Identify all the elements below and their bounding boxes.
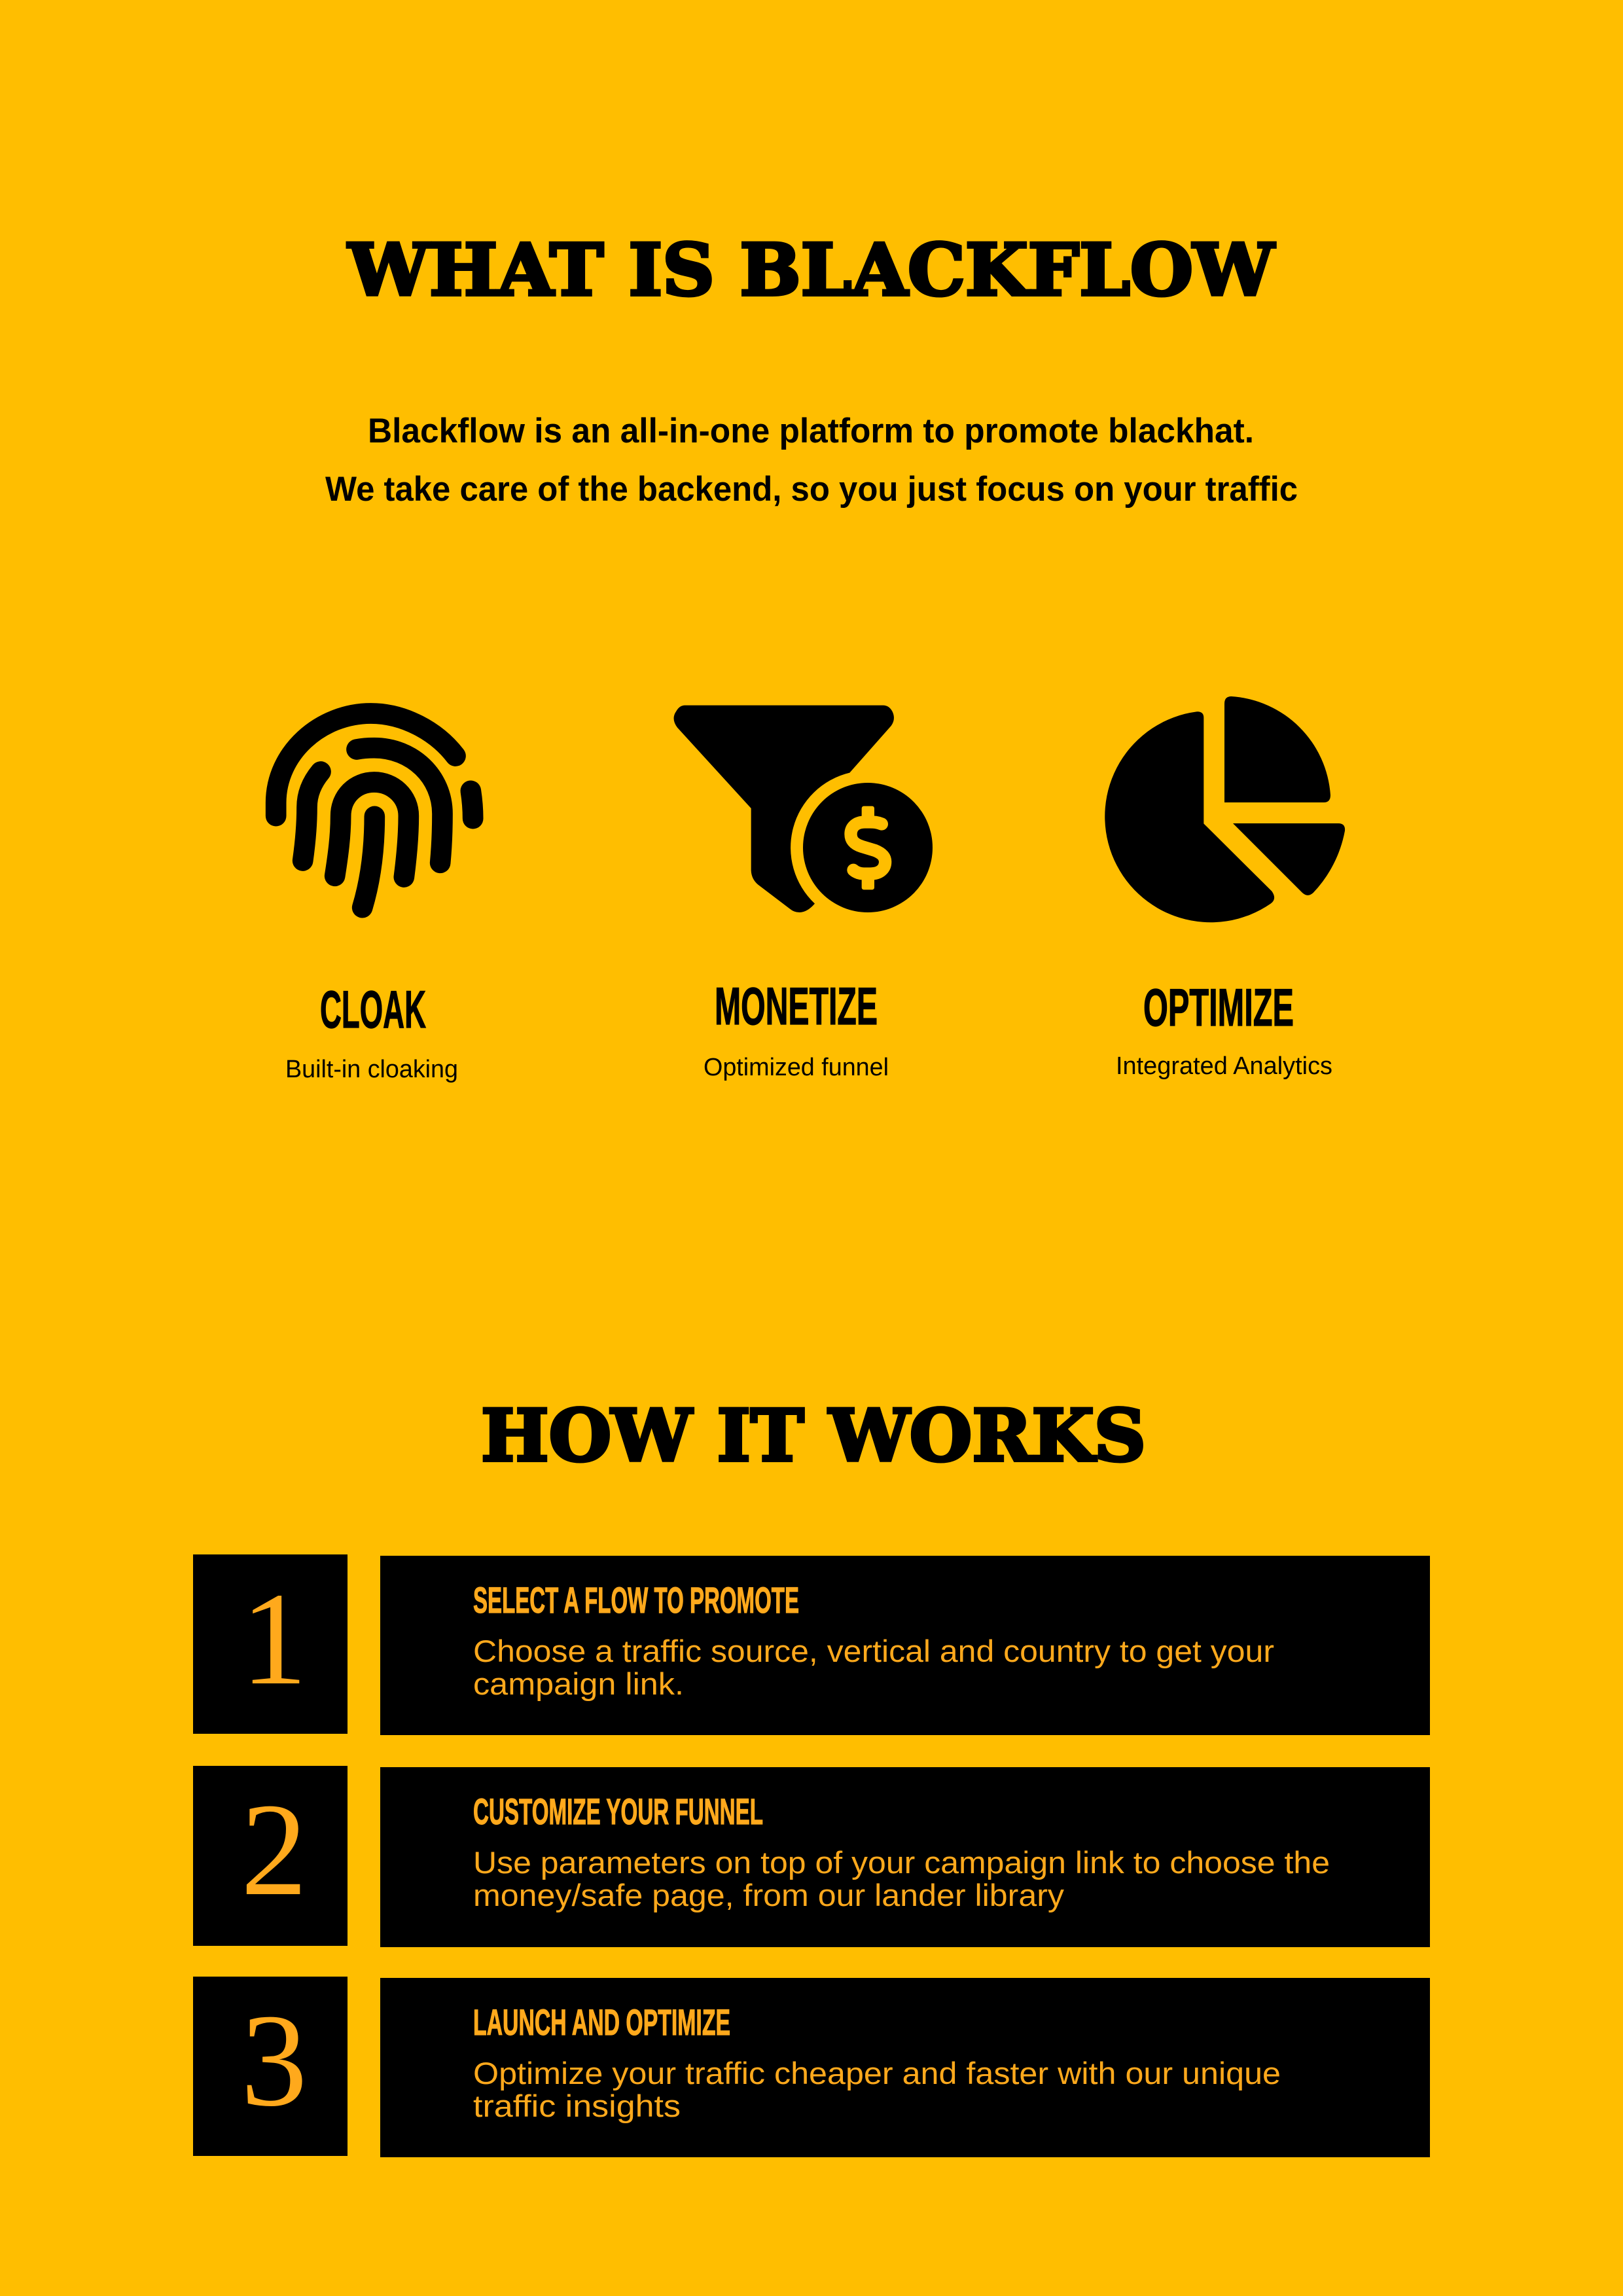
number box 1 xyxy=(193,1554,348,1734)
panel: step 2 text xyxy=(380,1767,1430,1947)
step 2 xyxy=(193,1766,1430,1947)
heading: cloak: CLOAK xyxy=(320,980,426,1039)
panel: step 2 text: Use parameters on top of your campaign link to choose the xyxy=(473,1845,1330,1880)
icon: fingerprint xyxy=(276,713,473,908)
step 3 xyxy=(193,1977,1430,2157)
panel: step 2 text: money/safe page, from our lander library xyxy=(473,1878,1065,1912)
panel: optimize xyxy=(1105,696,1345,1080)
panel: step 1 text: SELECT A FLOW TO PROMOTE xyxy=(473,1579,799,1621)
caption: optimized funnel: Optimized funnel xyxy=(704,1054,889,1081)
panel: cloak xyxy=(276,713,473,1083)
heading: optimize: OPTIMIZE xyxy=(1143,978,1294,1037)
panel: monetize xyxy=(674,706,933,1081)
panel: step 3 text xyxy=(380,1978,1430,2157)
panel: step 1 text: campaign link. xyxy=(473,1666,684,1701)
icon: pie chart xyxy=(1105,696,1345,922)
number box 3 xyxy=(193,1977,348,2156)
icon: funnel with dollar coin xyxy=(674,706,933,912)
number box 2: 2 xyxy=(241,1776,308,1923)
panel: step 1 text xyxy=(380,1556,1430,1735)
number box 3: 3 xyxy=(241,1986,308,2134)
title: what is blackflow: WHAT IS BLACKFLOW xyxy=(348,228,1275,312)
intro text block xyxy=(325,412,1298,509)
panel: step 2 text: CUSTOMIZE YOUR FUNNEL xyxy=(473,1791,763,1832)
caption: built-in cloaking: Built-in cloaking xyxy=(285,1056,458,1083)
caption: integrated analytics: Integrated Analytics xyxy=(1116,1052,1332,1080)
panel: step 1 text: Choose a traffic source, vertical and country to get your xyxy=(473,1634,1274,1668)
heading: monetize: MONETIZE xyxy=(715,977,878,1036)
intro text block: We take care of the backend, so you just focus on your traffic xyxy=(325,470,1298,509)
intro text block: Blackflow is an all-in-one platform to promote blackhat. xyxy=(368,412,1254,450)
panel: step 3 text: Optimize your traffic cheaper and faster with our unique xyxy=(473,2056,1281,2090)
number box 2 xyxy=(193,1766,348,1946)
panel: step 3 text: LAUNCH AND OPTIMIZE xyxy=(473,2001,730,2043)
panel: step 3 text: traffic insights xyxy=(473,2089,681,2123)
step 1 xyxy=(193,1554,1430,1735)
title: how it works: HOW IT WORKS xyxy=(481,1394,1146,1478)
number box 1: 1 xyxy=(241,1565,308,1712)
